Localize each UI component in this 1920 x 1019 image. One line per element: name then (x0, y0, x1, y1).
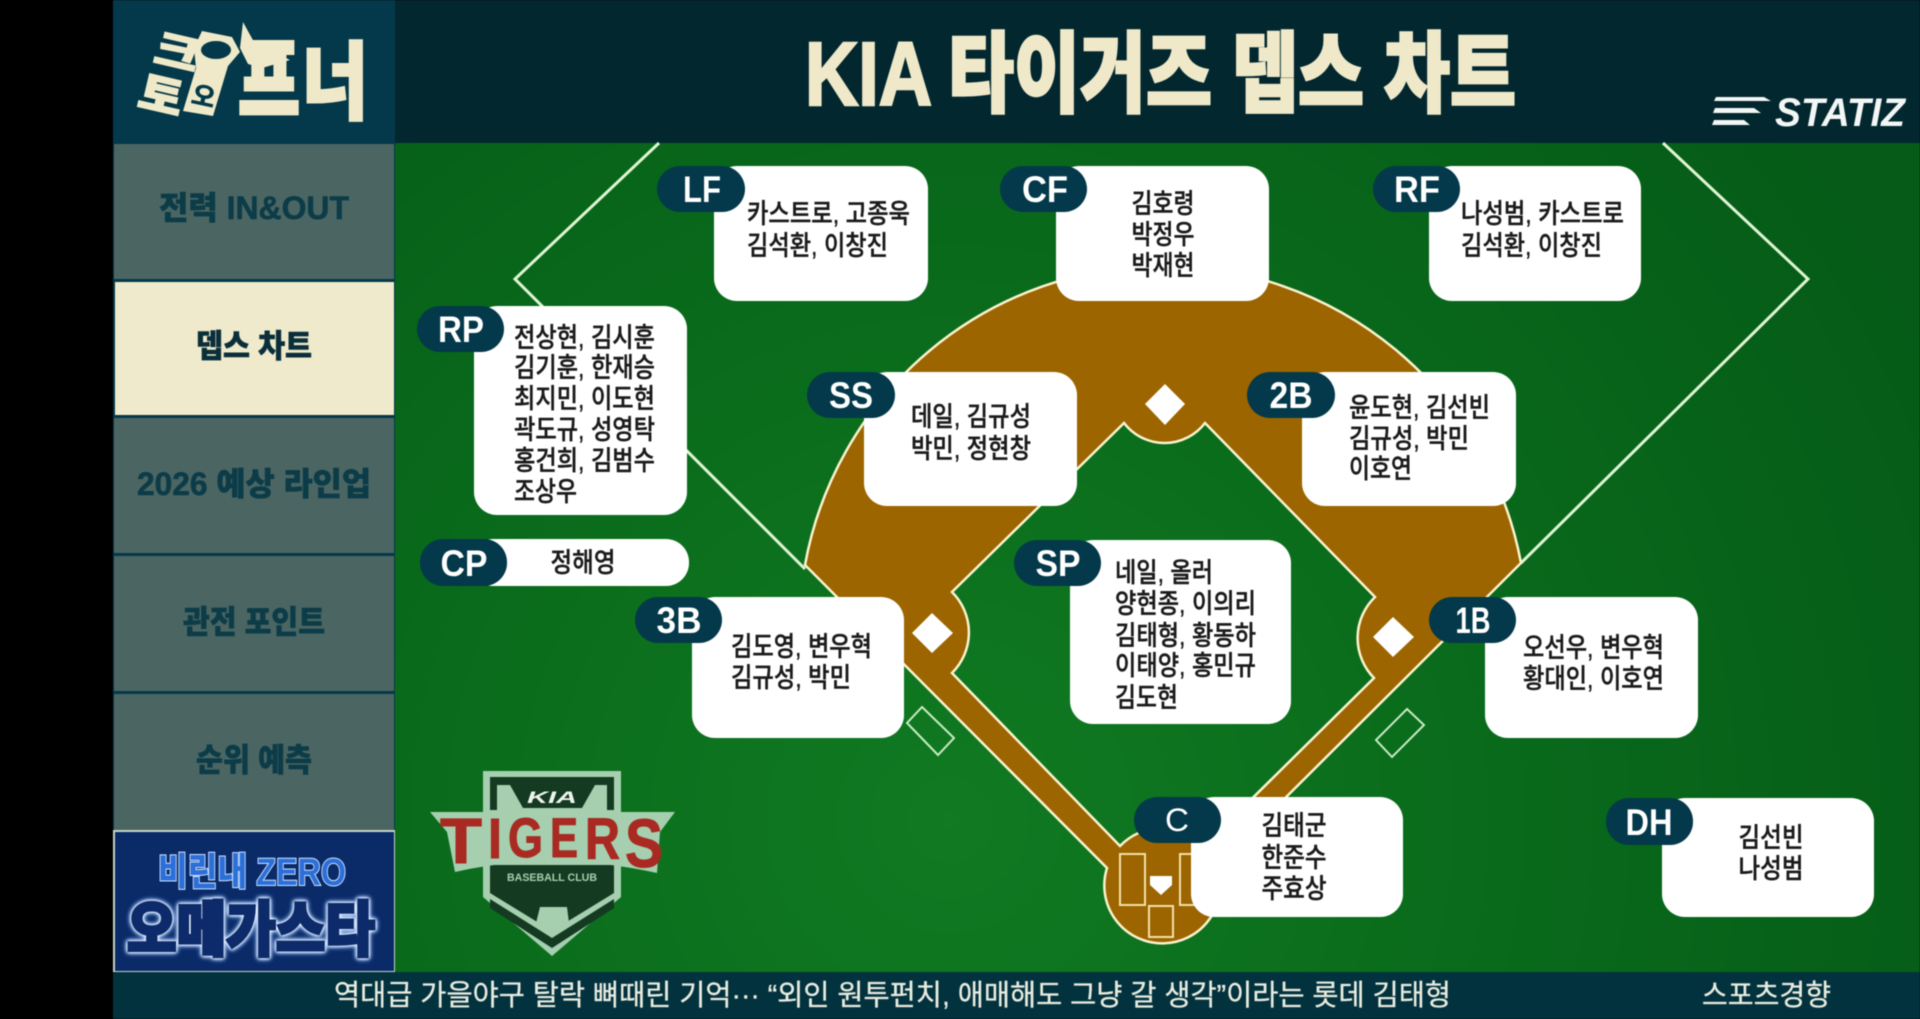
ad banner: 비린내 ZERO (158, 852, 346, 894)
news ticker: 스포츠경향 (1702, 980, 1831, 1012)
panel: DH: DH (1626, 802, 1672, 843)
team logo: Tigers: E (550, 806, 578, 869)
panel: CF: 박정우 (1132, 220, 1194, 250)
menu: 뎁스 차트 (active) (115, 282, 394, 415)
panel: RP: 김기훈, 한재승 (514, 353, 655, 383)
panel: C (1134, 797, 1403, 917)
panel: CF: 김호령 (1132, 189, 1194, 219)
panel: SP: 이태양, 홍민규 (1115, 651, 1256, 681)
menu: 순위 예측: 순위 예측 (196, 742, 312, 778)
menu: 전력 IN&OUT: 전력 IN&OUT (159, 190, 349, 226)
logo cell: 크 (150, 25, 204, 81)
menu: 관전 포인트: 관전 포인트 (183, 604, 325, 640)
title (805, 25, 1516, 125)
panel: SP: 양현종, 이의리 (1115, 589, 1256, 619)
panel: CF: 박재현 (1132, 251, 1194, 281)
panel: 3B (635, 597, 904, 738)
panel: C: 주효상 (1262, 874, 1326, 904)
ad banner: 오메가스타 (127, 897, 375, 964)
panel: RP: 최지민, 이도현 (514, 384, 655, 414)
logo cell (113, 0, 395, 143)
panel: CP (420, 539, 689, 586)
panel: 2B: 김규성, 박민 (1349, 424, 1469, 454)
foul lines (515, 143, 1808, 569)
panel: CF: CF (1022, 169, 1068, 210)
panel: RP: 곽도규, 성영탁 (514, 415, 655, 445)
team logo: Tigers: KIA (527, 788, 577, 807)
panel: DH: 김선빈 (1738, 823, 1804, 853)
panel: SP: 김도현 (1115, 683, 1178, 713)
panel: 1B: 황대인, 이호연 (1523, 664, 1664, 694)
team logo: Tigers (430, 771, 675, 956)
panel: SP: 김태형, 황동하 (1115, 621, 1256, 651)
panel: RF: 김석환, 이창진 (1461, 231, 1602, 261)
team logo: Tigers: BASEBALL CLUB (507, 872, 597, 884)
team logo: Tigers: S (625, 805, 663, 882)
team logo: Tigers: T (440, 805, 482, 877)
panel: 1B: 1B (1456, 600, 1490, 641)
panel: SP: SP (1036, 543, 1080, 584)
panel: SS: 박민, 정현창 (911, 434, 1031, 464)
logo cell: 프 (238, 29, 300, 134)
second base (1145, 384, 1185, 425)
panel: 3B: 3B (656, 600, 702, 641)
panel: 3B: 김규성, 박민 (731, 663, 851, 693)
news ticker (113, 972, 1920, 1019)
panel: RP (417, 306, 687, 515)
panel: DH: 나성범 (1738, 854, 1804, 884)
panel: CF (1000, 166, 1269, 301)
team logo: Tigers: G (508, 806, 543, 869)
logo cell: 너 (302, 36, 368, 130)
STATIZ logo (1712, 91, 1907, 135)
panel: RP: 조상우 (514, 477, 577, 507)
team logo: Tigers: R (585, 807, 620, 872)
header bar (395, 0, 1920, 143)
menu: 관전 포인트 (114, 556, 394, 691)
panel: SS (807, 372, 1077, 506)
menu: 전력 IN&OUT (114, 144, 394, 279)
menu: 2026 예상 라인업 (114, 418, 394, 553)
third base (912, 613, 953, 653)
team logo: Tigers: I (488, 807, 502, 871)
panel: CP: CP (440, 543, 488, 584)
panel: SP: 네일, 올러 (1115, 558, 1213, 588)
panel: 2B: 이호연 (1349, 454, 1412, 484)
ad banner (114, 831, 395, 972)
panel: SS: 데일, 김규성 (911, 402, 1031, 432)
panel: SP (1014, 540, 1291, 724)
panel: 2B (1247, 372, 1516, 506)
panel: 3B: 김도영, 변우혁 (731, 632, 872, 662)
left coach box (907, 707, 954, 755)
infield dirt (805, 266, 1521, 943)
menu: 2026 예상 라인업: 2026 예상 라인업 (137, 466, 371, 502)
logo cell: 오 (189, 80, 218, 114)
logo cell: 토 (134, 67, 188, 125)
panel: C: 한준수 (1262, 843, 1326, 873)
panel: RP: 홍건희, 김범수 (514, 446, 655, 476)
panel: RF (1373, 166, 1641, 301)
panel: SS: SS (829, 375, 873, 416)
panel: RP: RP (438, 309, 484, 350)
panel: LF: LF (683, 169, 721, 210)
panel: LF (657, 166, 928, 301)
panel: 2B: 윤도현, 김선빈 (1349, 393, 1490, 423)
right coach box (1376, 709, 1424, 757)
panel: LF: 김석환, 이창진 (747, 231, 888, 261)
menu: 순위 예측 (114, 694, 394, 830)
panel: C: 김태군 (1262, 811, 1326, 841)
panel: LF: 카스트로, 고종욱 (747, 199, 910, 229)
panel: 2B: 2B (1270, 375, 1312, 416)
panel: RP: 전상현, 김시훈 (514, 323, 655, 353)
sidebar (113, 143, 395, 830)
news ticker: 역대급 가을야구 탈락 뼈때린 기억··· “외인 원투펀치, 애매해도 그냥 갈 생각”이라는 롯데 김태형 (334, 979, 1451, 1012)
menu: 뎁스 차트 (active): 뎁스 차트 (196, 328, 312, 364)
panel: CP: 정해영 (550, 548, 616, 578)
panel: C: C (1165, 802, 1189, 838)
left black margin (0, 0, 113, 1019)
first base (1373, 617, 1414, 657)
panel: DH (1606, 798, 1874, 917)
panel: 1B (1429, 597, 1698, 738)
home plate area (1120, 854, 1205, 937)
panel: RF: RF (1394, 169, 1440, 210)
panel: 1B: 오선우, 변우혁 (1523, 633, 1664, 663)
panel: RF: 나성범, 카스트로 (1461, 199, 1624, 229)
title: 타이거즈 뎁스 차트 (948, 25, 1516, 124)
field background (395, 143, 1920, 972)
title: KIA (805, 25, 932, 125)
STATIZ logo: STATIZ (1775, 91, 1907, 135)
